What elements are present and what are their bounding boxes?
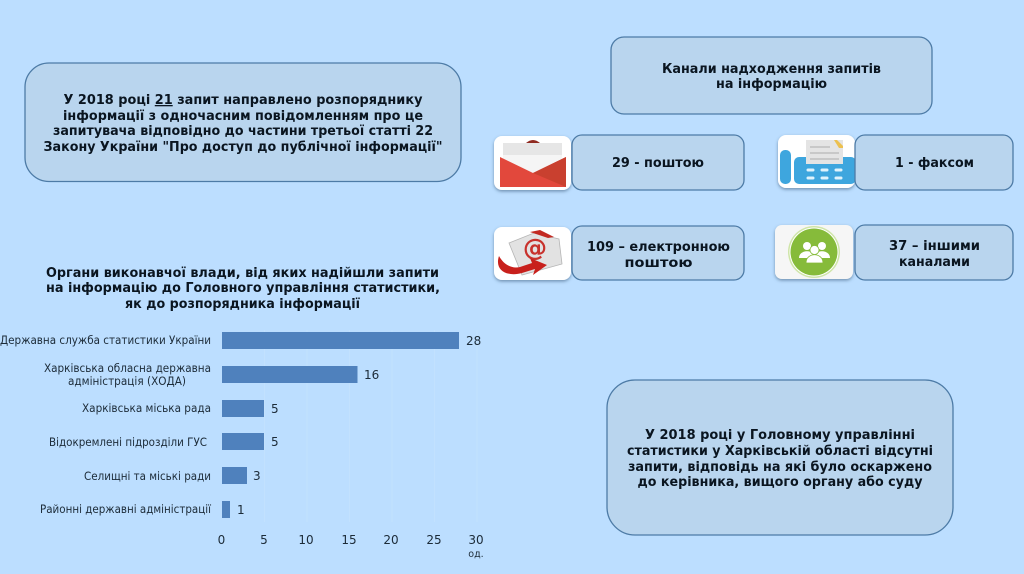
- panel: channels heading: Канали надходження запитів: [662, 62, 881, 77]
- bars: [222, 332, 459, 518]
- panel: request forwarded to information holder: Закону України "Про доступ до публічної інформації": [44, 140, 442, 155]
- value labels: 1: [237, 503, 245, 517]
- panel: post count: 29 - поштою: [612, 156, 704, 171]
- panel: other channels count: каналами: [899, 255, 970, 270]
- axis labels: 5: [260, 533, 268, 547]
- value labels: 28: [466, 334, 481, 348]
- axis labels: од.: [468, 549, 484, 560]
- panel: channels heading: на інформацію: [716, 77, 827, 92]
- panel: no appealed requests: [607, 380, 953, 535]
- panel: no appealed requests: запити, відповідь на які було оскаржено: [628, 460, 932, 475]
- value labels: 5: [271, 402, 279, 416]
- axis labels: 30: [468, 533, 484, 547]
- panel: email count: 109 – електронною: [587, 240, 730, 255]
- value labels: 5: [271, 435, 279, 449]
- icon: email with at sign: [494, 227, 571, 280]
- panel: request forwarded to information holder: У 2018 році 21 запит направлено розпоряднику: [64, 93, 423, 108]
- panel: request forwarded to information holder: [25, 63, 461, 182]
- category labels: Відокремлені підрозділи ГУС: [49, 435, 207, 449]
- panel: other channels count: 37 – іншими: [889, 239, 980, 254]
- bar chart: requests by authority: [0, 330, 484, 560]
- axis labels: 10: [298, 533, 314, 547]
- panel: other channels count: [855, 225, 1013, 280]
- panel: no appealed requests: У 2018 році у Головному управлінні: [645, 428, 915, 443]
- category labels: Харківська міська рада: [82, 401, 211, 415]
- icon: email with at sign: @: [523, 234, 547, 262]
- axis labels: 25: [426, 533, 442, 547]
- category labels: Районні державні адміністрації: [40, 502, 212, 516]
- panel: fax count: [855, 135, 1013, 190]
- category labels: Селищні та міські ради: [84, 469, 211, 483]
- value labels: 3: [253, 469, 261, 483]
- chart heading: [46, 266, 440, 312]
- panel: channels heading: [611, 37, 932, 114]
- panel: request forwarded to information holder: запитувача відповідно до частини третьої статті 22: [53, 124, 433, 139]
- panel: email count: [572, 226, 744, 280]
- chart heading: Органи виконавчої влади, від яких надійшли запити: [46, 266, 439, 281]
- panel: no appealed requests: до керівника, вищого органу або суду: [638, 475, 923, 490]
- chart heading: як до розпорядника інформації: [125, 297, 361, 312]
- panel: fax count: 1 - факсом: [895, 156, 974, 171]
- axis labels: [218, 533, 484, 560]
- icon: people in green circle: [775, 225, 853, 279]
- value labels: [237, 334, 481, 517]
- panel: post count: [572, 135, 744, 190]
- panel: no appealed requests: статистики у Харківській області відсутні: [627, 444, 933, 459]
- panel: request forwarded to information holder: інформації з одночасним повідомленням про це: [63, 109, 423, 124]
- axis labels: 15: [341, 533, 357, 547]
- category labels: [0, 333, 212, 516]
- icon: red envelope: [494, 136, 571, 190]
- value labels: 16: [364, 368, 379, 382]
- chart heading: на інформацію до Головного управління статистики,: [46, 281, 440, 296]
- category labels: Державна служба статистики України: [0, 333, 211, 347]
- category labels: Харківська обласна державна: [44, 361, 211, 375]
- axis labels: 20: [383, 533, 399, 547]
- axis labels: 0: [218, 533, 225, 547]
- panel: email count: поштою: [624, 256, 693, 271]
- icon: fax machine: [778, 135, 856, 188]
- category labels: адміністрація (ХОДА): [68, 374, 186, 388]
